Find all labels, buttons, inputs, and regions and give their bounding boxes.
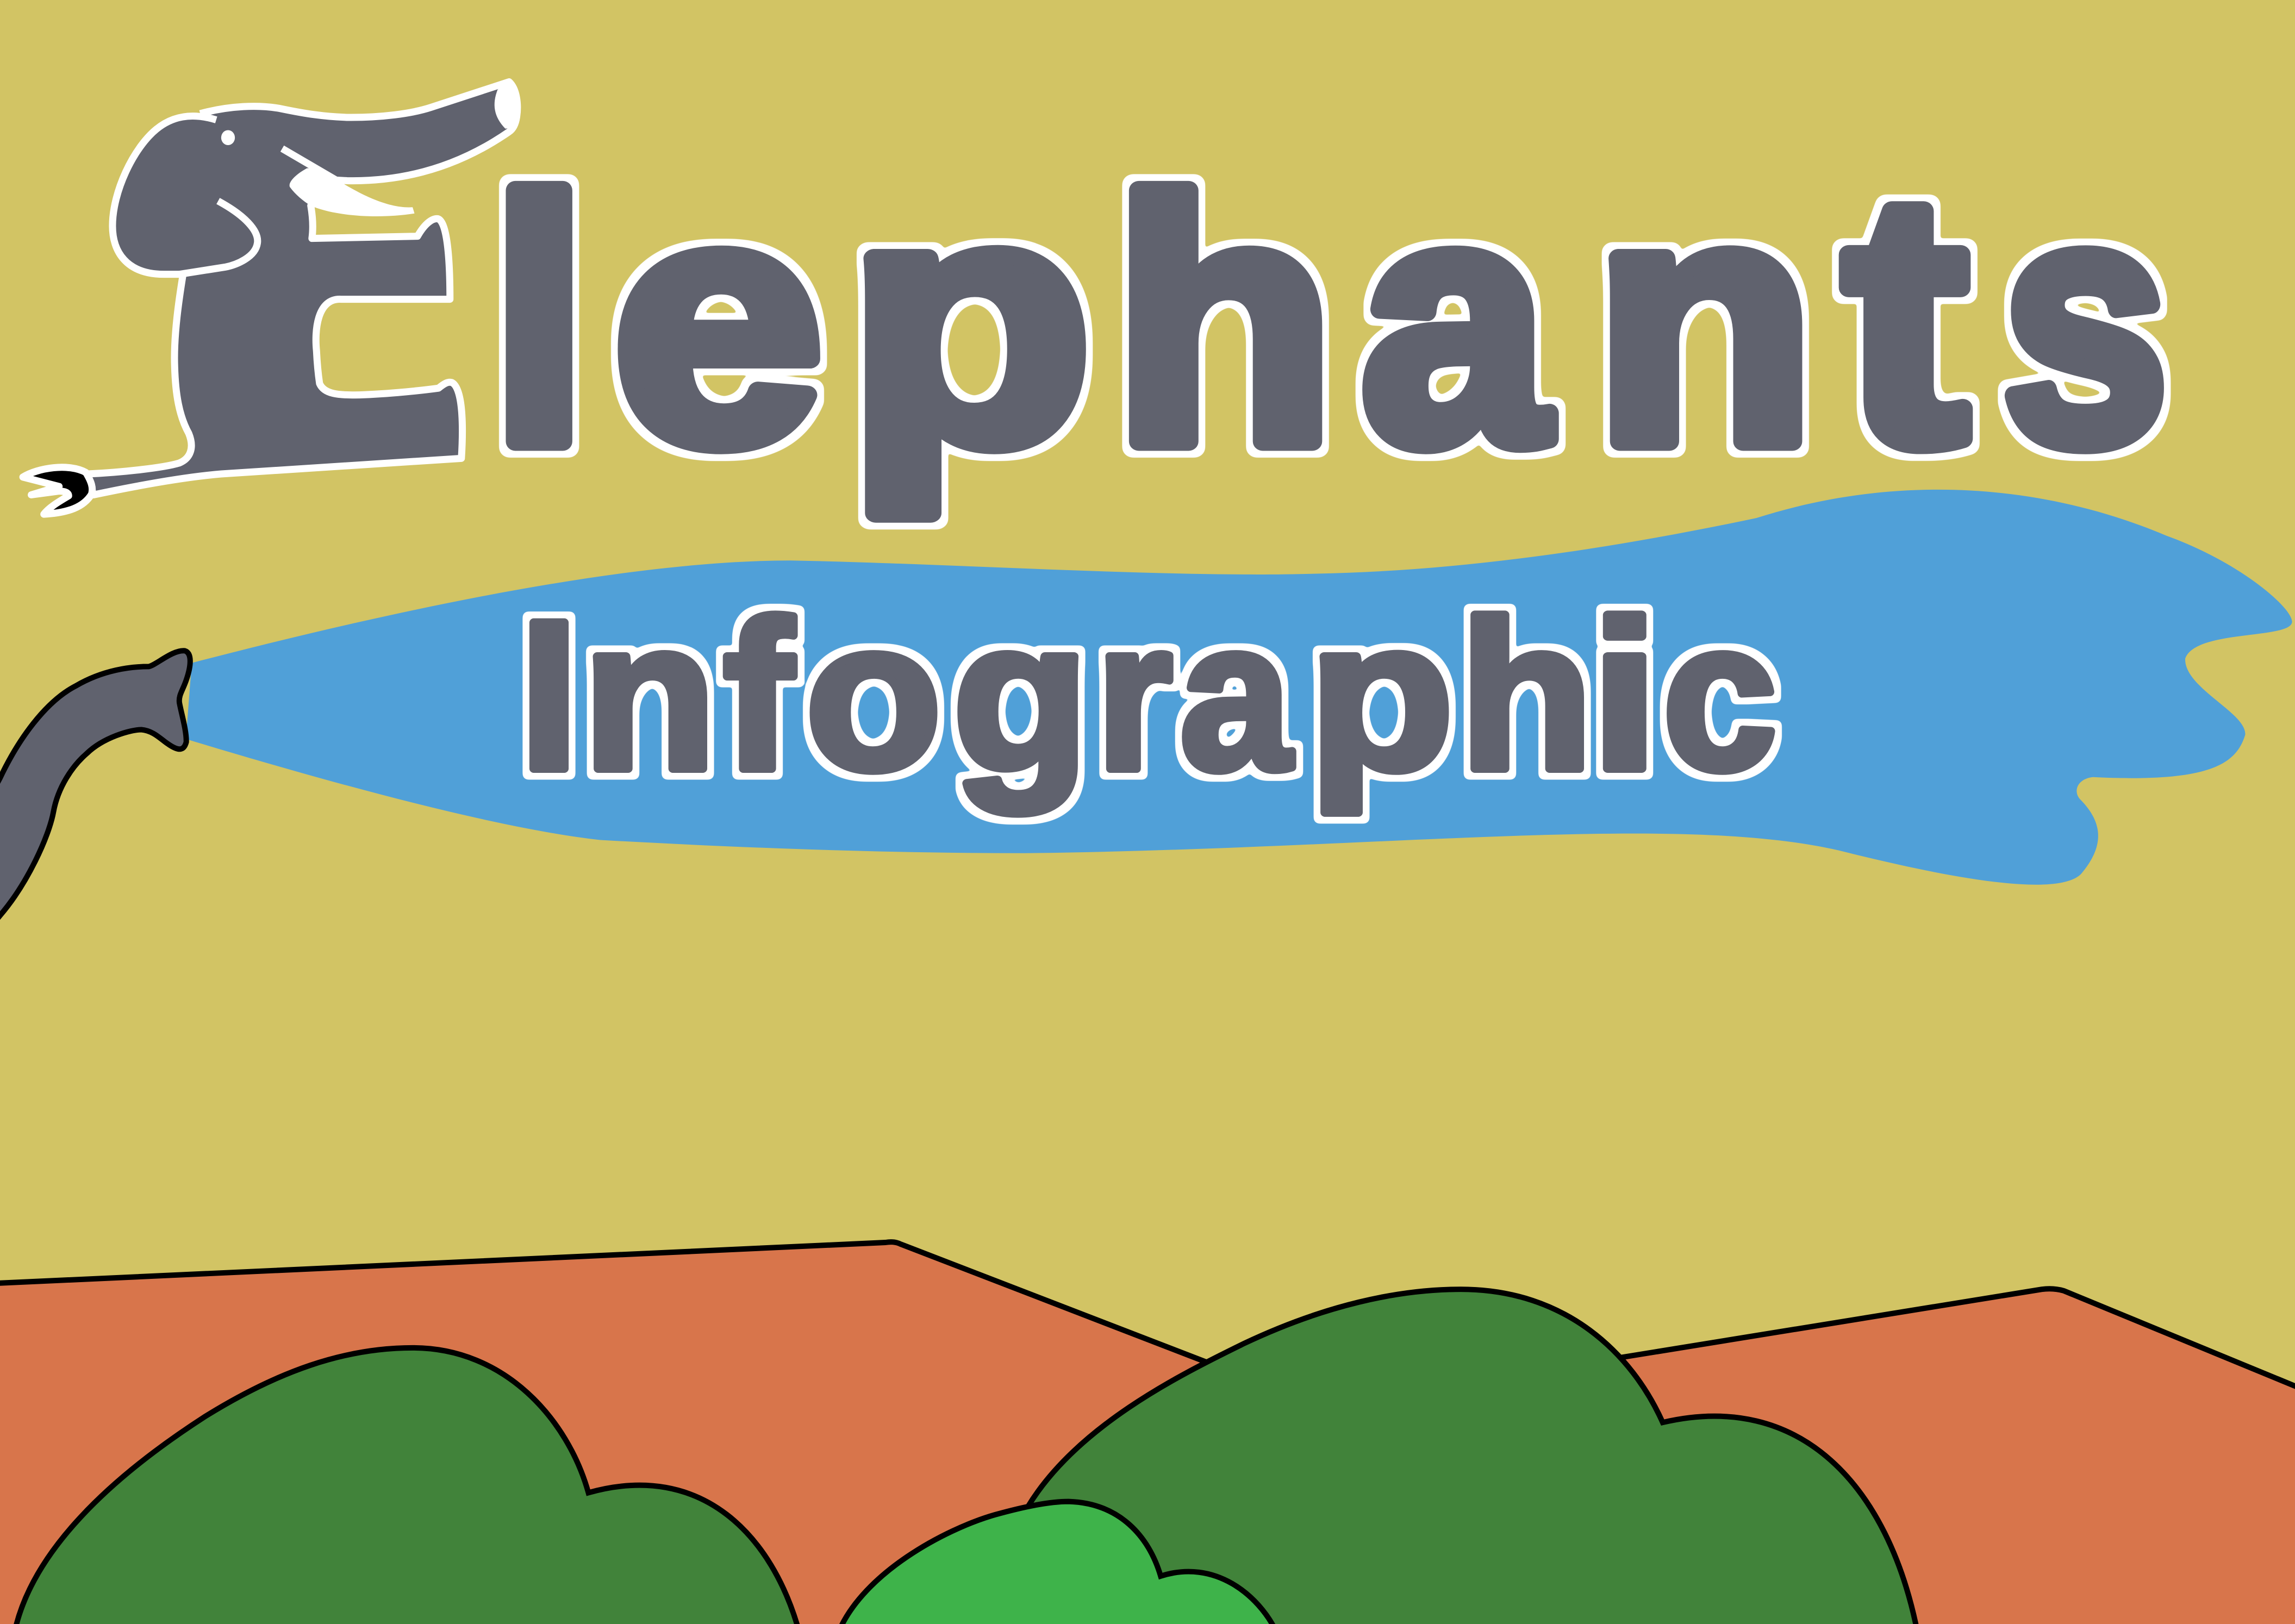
elephant tusk xyxy=(290,168,415,216)
orange hills xyxy=(0,1242,2295,1624)
subtitle: Infographic: a xyxy=(1180,577,1292,814)
subtitle: Infographic: g xyxy=(953,577,1089,815)
title: Elephants (letters after the elephant E): h xyxy=(1114,128,1334,515)
large green bush right xyxy=(1010,1289,1917,1624)
subtitle: Infographic: n xyxy=(583,577,716,814)
blue water spray xyxy=(186,490,2292,885)
subtitle: Infographic: h xyxy=(1460,577,1593,814)
subtitle: Infographic: f xyxy=(724,577,795,814)
title: Elephants (letters after the elephant E): t xyxy=(1844,122,1967,516)
subtitle: Infographic: r xyxy=(1096,577,1173,814)
subtitle: Infographic: c xyxy=(1663,577,1777,814)
subtitle: Infographic: i xyxy=(1591,577,1658,814)
elephant ear xyxy=(179,201,258,274)
green bush left xyxy=(15,1348,799,1624)
title: Elephants (letters after the elephant E): e xyxy=(613,128,823,515)
title: Elephants (letters after the elephant E) xyxy=(491,122,2168,517)
elephant shaped letter E xyxy=(23,81,519,514)
title: Elephants (letters after the elephant E): l xyxy=(491,128,587,515)
elephant eye xyxy=(221,130,235,145)
elephant trunk spraying water xyxy=(0,651,190,925)
title: Elephants (letters after the elephant E): a xyxy=(1362,128,1550,515)
elephant mouth line xyxy=(282,148,335,180)
subtitle: Infographic: I xyxy=(520,577,578,814)
tail tuft xyxy=(23,467,92,514)
light green bush xyxy=(839,1502,1276,1624)
subtitle: Infographic: o xyxy=(806,577,941,814)
trunk tip xyxy=(495,81,519,129)
title: Elephants (letters after the elephant E): p xyxy=(848,129,1092,517)
elephant body xyxy=(88,82,517,495)
subtitle: Infographic: p xyxy=(1309,577,1454,815)
subtitle: Infographic xyxy=(520,577,1777,815)
title: Elephants (letters after the elephant E): n xyxy=(1595,128,1814,515)
title: Elephants (letters after the elephant E): s xyxy=(2003,128,2168,515)
